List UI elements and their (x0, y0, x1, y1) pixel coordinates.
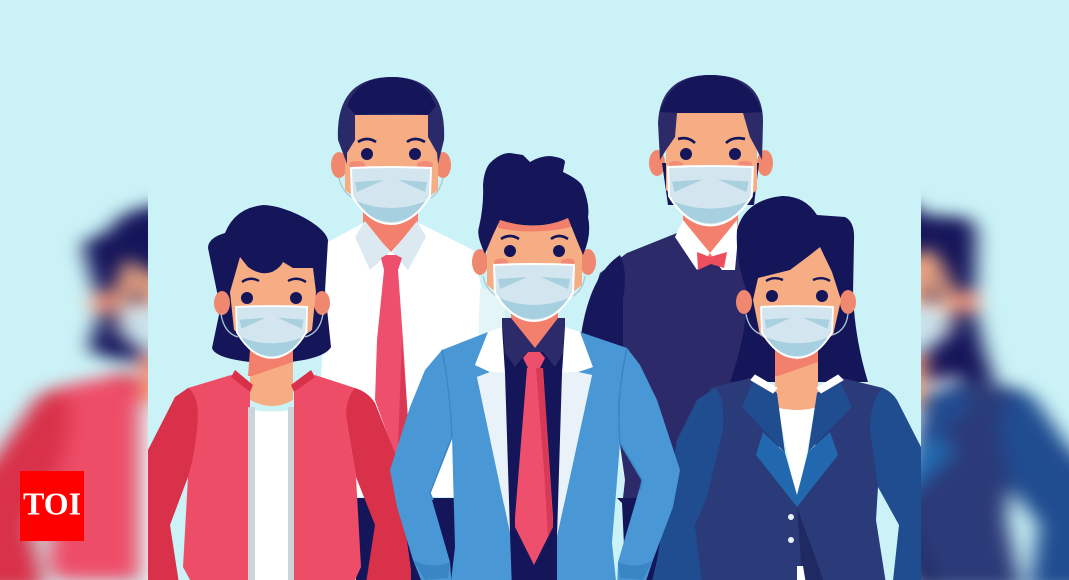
person: back left man with white shirt and red tie (320, 77, 505, 580)
background panel: sharp illustration backdrop (148, 0, 921, 580)
person: back right man with navy vest and bow tie (581, 75, 773, 580)
left arm: red jacket (110, 388, 198, 580)
mask: back left man (351, 167, 431, 224)
mask: front left woman (236, 306, 307, 358)
left arm: blue suit (390, 350, 452, 580)
mask: back right man (668, 166, 753, 225)
necktie (515, 352, 553, 565)
person: center man in blue suit with red tie (390, 153, 680, 580)
right arm: blue suit (617, 348, 680, 580)
mask: center man (494, 264, 574, 321)
lapels: white (475, 327, 505, 373)
person: front left woman in red jacket (110, 205, 411, 580)
right arm: navy blazer (870, 388, 960, 580)
blue suit body (442, 332, 512, 580)
mask: front right woman (761, 306, 833, 358)
person: front right woman in navy blazer (650, 196, 960, 580)
right arm: red jacket (346, 388, 411, 580)
left arm: navy blazer (650, 388, 723, 580)
illustration: group of five people in masks (110, 75, 960, 580)
logo: TOI red badge: TOI (23, 486, 81, 522)
logo: TOI red badge (20, 471, 84, 541)
